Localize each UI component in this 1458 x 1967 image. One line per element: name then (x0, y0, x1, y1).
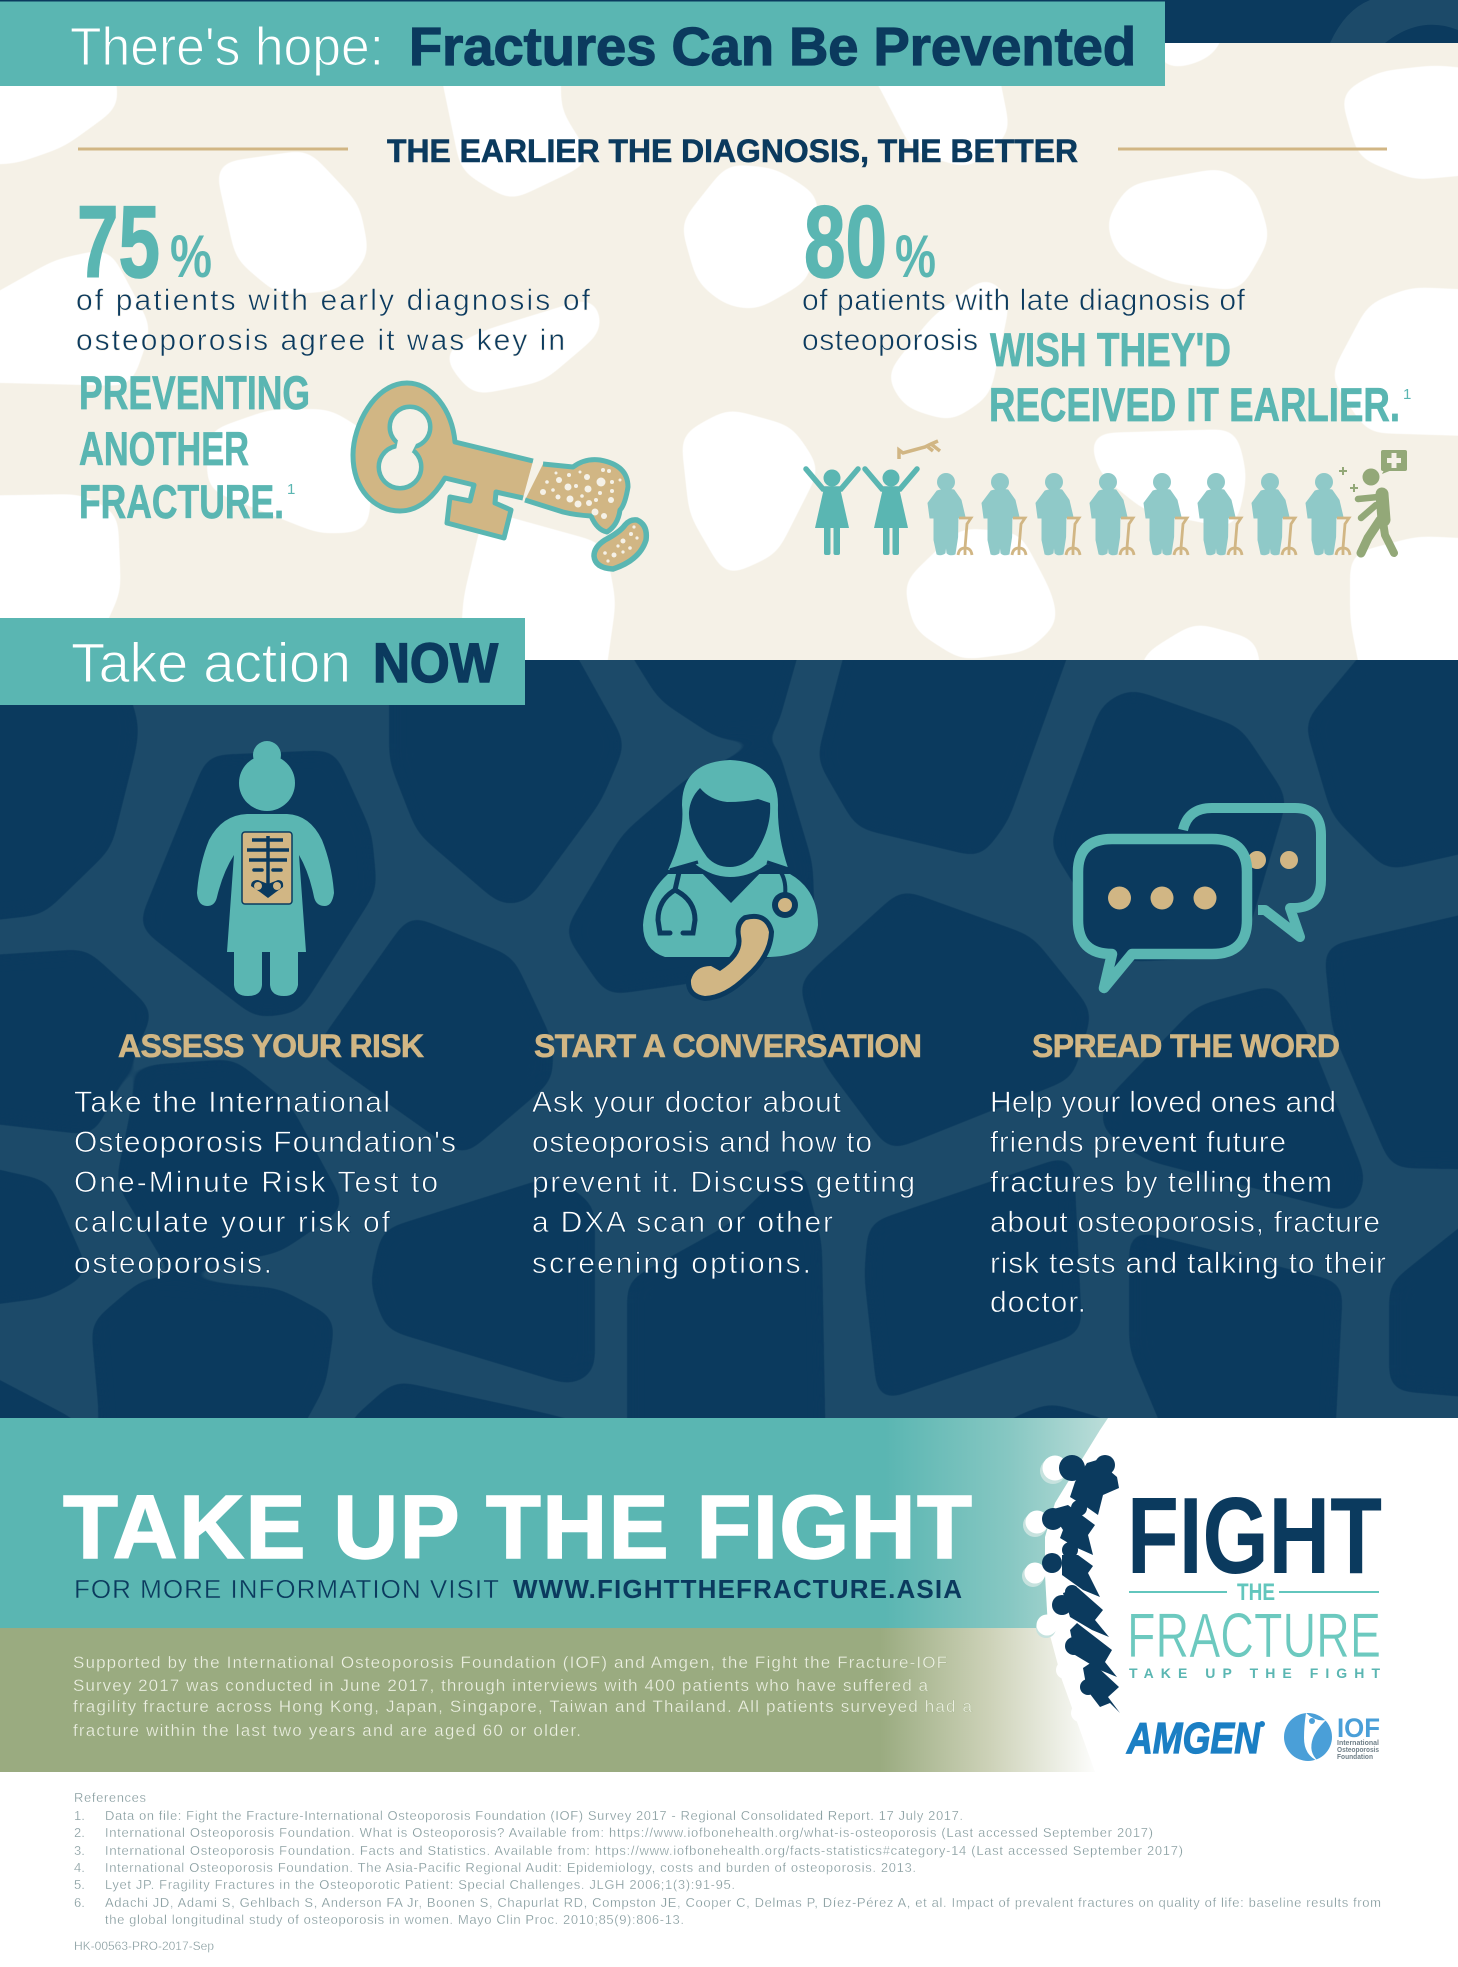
statistic: 75 percent early diagnosis: PREVENTING (79, 366, 310, 419)
text: website link (74, 1574, 962, 1604)
text: references: 6. (74, 1895, 85, 1910)
statistic: 75 percent early diagnosis: ANOTHER (79, 422, 249, 475)
title banner: Fractures Can Be Prevented (409, 17, 1136, 77)
text: start a conversation details: Ask your doctor about (532, 1086, 842, 1119)
text: references (74, 1790, 1381, 1953)
text: references: 1. (74, 1808, 85, 1823)
heading: take up the fight: TAKE UP THE FIGHT (63, 1478, 972, 1578)
text: start a conversation details: osteoporosis and how to (532, 1126, 872, 1159)
text: assess your risk details (74, 1086, 456, 1280)
statistic: 80 percent late diagnosis: 1 (1403, 386, 1411, 403)
text: references: International Osteoporosis Foundation. The Asia-Pacific Regional Audit: Epidemiology, costs and burden of osteoporosis. 2013. (105, 1860, 916, 1875)
statistic: 80 percent late diagnosis: % (895, 223, 936, 290)
text: start a conversation details: prevent it. Discuss getting (532, 1166, 915, 1199)
text: start a conversation details: a DXA scan or other (532, 1206, 833, 1239)
text: survey note: Survey 2017 was conducted in June 2017, through interviews with 400 patients who have suffered a (73, 1676, 929, 1695)
statistic: 75 percent early diagnosis: 1 (287, 481, 295, 498)
text: spread the word details: Help your loved ones and (990, 1086, 1336, 1119)
statistic: 80 percent late diagnosis: 80 (804, 185, 887, 299)
icon: woman with spine x-ray (197, 741, 334, 996)
logo: fight the fracture: THE (1237, 1579, 1275, 1606)
statistic: 75 percent early diagnosis: 75 (77, 185, 160, 299)
text: survey note: fragility fracture across Hong Kong, Japan, Singapore, Taiwan and Thailand. All patients surveyed had a (73, 1697, 973, 1716)
title banner (0, 0, 1165, 86)
take action banner: Take action (71, 631, 351, 694)
text: references: 3. (74, 1843, 85, 1858)
statistic: 80 percent late diagnosis: WISH THEY'D (990, 323, 1231, 376)
logo: iof: Osteoporosis (1337, 1747, 1379, 1754)
logo: fight the fracture: FIGHT (1127, 1475, 1382, 1597)
statistic: 75 percent early diagnosis: osteoporosis agree it was key in (76, 324, 565, 357)
logo: iof: Foundation (1337, 1754, 1373, 1761)
text: spread the word details: friends prevent future (990, 1126, 1286, 1159)
icon: two speech bubbles (1078, 808, 1321, 988)
text: references: the global longitudinal study of osteoporosis in women. Mayo Clin Proc. 2010;85(9):806-13. (105, 1912, 684, 1927)
logo: amgen: AMGEN (1126, 1714, 1261, 1763)
title banner: There's hope: (70, 17, 384, 77)
column: start a conversation (532, 760, 922, 1280)
take action banner: NOW (373, 631, 498, 694)
text: references: 2. (74, 1825, 85, 1840)
text: references: Adachi JD, Adami S, Gehlbach S, Anderson FA Jr, Boonen S, Chapurlat RD, Compston JE, Cooper C, Delmas P, Díez-Pérez A, et al. Impact of prevalent fractures on quality of life: baseline results from (105, 1895, 1381, 1910)
heading: spread the word: SPREAD THE WORD (1032, 1028, 1340, 1064)
text: start a conversation details: screening options. (532, 1247, 811, 1280)
take action banner (0, 618, 525, 705)
statistic: 75 percent early diagnosis: of patients with early diagnosis of (76, 284, 591, 317)
text: references: Data on file: Fight the Fracture-International Osteoporosis Foundation (IOF) Survey 2017 - Regional Consolidated Report. 17 July 2017. (105, 1808, 963, 1823)
column: assess your risk (74, 741, 456, 1280)
statistic: 75 percent early diagnosis: FRACTURE. (79, 475, 284, 528)
text: spread the word details: fractures by telling them (990, 1166, 1332, 1199)
text: assess your risk details: calculate your risk of (74, 1206, 391, 1239)
text: start a conversation details (532, 1086, 915, 1280)
text: survey note: Supported by the International Osteoporosis Foundation (IOF) and Amgen, the Fight the Fracture-IOF (73, 1653, 947, 1672)
text: assess your risk details: Osteoporosis Foundation's (74, 1126, 456, 1159)
icon: spine (1022, 1455, 1120, 1722)
subheading: the earlier the diagnosis (78, 133, 1387, 169)
text: survey note (73, 1653, 973, 1740)
statistic: 80 percent late diagnosis: of patients with late diagnosis of (802, 284, 1246, 317)
statistic: 75 percent early diagnosis (76, 185, 591, 528)
logo: iof: IOF (1337, 1713, 1380, 1743)
logo: iof: International (1337, 1740, 1379, 1747)
icon: key turning into a fractured bone (353, 383, 646, 569)
subheading: the earlier the diagnosis: THE EARLIER THE DIAGNOSIS, THE BETTER (387, 133, 1078, 169)
panel: navy take action section background (0, 640, 1458, 1460)
text: website link: WWW.FIGHTTHEFRACTURE.ASIA (513, 1574, 962, 1604)
logo: fight the fracture: TAKE UP THE FIGHT (1129, 1665, 1380, 1681)
panel: navy strip top right (1165, 0, 1458, 43)
panel: take up the fight call to action (0, 1418, 1458, 1772)
text: references: 4. (74, 1860, 85, 1875)
statistic: 80 percent late diagnosis (802, 185, 1411, 431)
text: references: References (74, 1790, 146, 1805)
text: spread the word details (990, 1086, 1386, 1319)
logo: fight the fracture (1127, 1475, 1382, 1681)
text: assess your risk details: osteoporosis. (74, 1247, 272, 1280)
heading: start a conversation: START A CONVERSATION (534, 1028, 922, 1064)
statistic: 80 percent late diagnosis: osteoporosis (802, 324, 978, 357)
logo: iof (1284, 1713, 1380, 1761)
text: references: International Osteoporosis Foundation. What is Osteoporosis? Available from: https://www.iofbonehealth.org/what-is-osteoporosis (Last accessed September 2017) (105, 1825, 1153, 1840)
text: assess your risk details: Take the International (74, 1086, 390, 1119)
text: spread the word details: doctor. (990, 1286, 1086, 1319)
text: survey note: fracture within the last two years and are aged 60 or older. (73, 1721, 581, 1740)
pictogram: people with and without early diagnosis (806, 441, 1407, 555)
text: references: International Osteoporosis Foundation. Facts and Statistics. Available from: https://www.iofbonehealth.org/facts-statistics#category-14 (Last accessed September 2017) (105, 1843, 1183, 1858)
text: spread the word details: risk tests and talking to their (990, 1247, 1386, 1280)
text: website link: FOR MORE INFORMATION VISIT (74, 1574, 499, 1604)
text: references: 5. (74, 1877, 85, 1892)
text: spread the word details: about osteoporosis, fracture (990, 1206, 1380, 1239)
column: spread the word (990, 808, 1386, 1319)
panel: cream diagnosis section background (0, 20, 1458, 700)
text: references: Lyet JP. Fragility Fractures in the Osteoporotic Patient: Special Challenges. JLGH 2006;1(3):91-95. (105, 1877, 735, 1892)
text: references: HK-00563-PRO-2017-Sep (74, 1939, 214, 1953)
icon: doctor with stethoscope and phone (643, 760, 818, 996)
text: assess your risk details: One-Minute Risk Test to (74, 1166, 438, 1199)
heading: assess your risk: ASSESS YOUR RISK (118, 1028, 424, 1064)
statistic: 75 percent early diagnosis: % (170, 223, 212, 290)
